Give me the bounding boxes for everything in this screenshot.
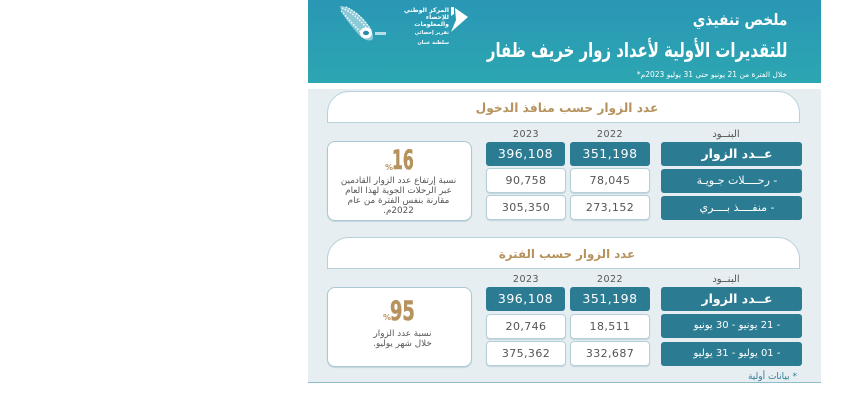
callout: 95 percent — [327, 287, 472, 367]
callout description: خلال شهر يوليو. — [373, 339, 432, 349]
row label: visitors: عــدد الزوار — [701, 291, 773, 306]
land 2023: 305,350 — [502, 201, 550, 214]
July 2023 — [486, 341, 566, 366]
July 2022 — [570, 341, 650, 366]
logo: sub text: تقرير إحصائي — [415, 30, 449, 36]
percent sign: % — [383, 313, 391, 322]
land 2023 — [486, 195, 566, 220]
heading: executive summary: ملخص تنفيذي — [692, 11, 787, 29]
year label 2023: 2023 — [513, 274, 539, 285]
row label: visitors — [661, 287, 802, 311]
callout description — [373, 329, 432, 349]
row label: land — [661, 196, 802, 220]
June 2023 — [486, 314, 566, 339]
footnote: * بيانات أولية — [748, 372, 797, 382]
row label: visitors — [661, 142, 802, 166]
percent value: 16 — [392, 145, 414, 176]
column label: items: البنــود — [712, 274, 740, 285]
year label 2022: 2022 — [597, 274, 623, 285]
2022 total — [570, 142, 650, 166]
row label: air — [661, 169, 802, 193]
June 2022 — [570, 314, 650, 339]
2022 total — [570, 287, 650, 311]
logo: national centre text: للإحصاء — [426, 14, 449, 21]
callout description: مقارنة بنفس الفترة من عام — [348, 196, 449, 206]
2023 total — [486, 287, 565, 311]
percent value: 95 — [390, 296, 415, 327]
content background — [308, 89, 821, 383]
logo: sub text — [414, 30, 449, 46]
July 2022: 332,687 — [586, 347, 634, 360]
land 2022 — [570, 195, 650, 220]
callout: 16 percent — [327, 141, 472, 221]
percent sign: % — [385, 163, 393, 172]
icon: comet emblem — [340, 6, 386, 40]
row label: June — [661, 314, 802, 338]
row label: land: - منفــــذ بــــري — [699, 201, 775, 214]
June 2023: 20,746 — [506, 320, 546, 333]
row label: July: - 01 يوليو - 31 يوليو — [694, 348, 780, 359]
row label: June: - 21 يونيو - 30 يونيو — [694, 320, 780, 331]
panel title: by period — [327, 237, 800, 269]
panel title: by entry ports — [327, 91, 800, 123]
air 2023 — [486, 168, 566, 193]
air 2023: 90,758 — [506, 174, 546, 187]
land 2022: 273,152 — [586, 201, 634, 214]
panel title: by entry ports: عدد الزوار حسب منافذ الدخول — [476, 101, 658, 115]
callout description — [341, 176, 456, 216]
heading: main title: للتقديرات الأولية لأعداد زوار خريف ظفار — [486, 38, 787, 62]
2023 total: 396,108 — [498, 146, 553, 161]
2023 total — [486, 142, 565, 166]
July 2023: 375,362 — [502, 347, 550, 360]
icon: centre logo mark — [451, 7, 468, 32]
row label: July — [661, 342, 802, 366]
year label 2022: 2022 — [597, 129, 623, 140]
air 2022: 78,045 — [590, 174, 630, 187]
June 2022: 18,511 — [590, 320, 630, 333]
panel title: by period: عدد الزوار حسب الفترة — [499, 247, 635, 261]
2023 total: 396,108 — [498, 291, 553, 306]
year label 2023: 2023 — [513, 129, 539, 140]
callout description: نسبة إرتفاع عدد الزوار القادمين — [341, 176, 456, 186]
logo: national centre text: المركز الوطني — [404, 7, 449, 14]
callout description: نسبة عدد الزوار — [374, 329, 431, 339]
banner — [308, 0, 821, 83]
logo: national centre text — [404, 7, 449, 28]
row label: air: - رحــــلات جـويـة — [697, 174, 777, 187]
logo: sub text: سلطنة عمان — [417, 40, 449, 46]
air 2022 — [570, 168, 650, 193]
callout description: عبر الرحلات الجوية لهذا العام — [345, 186, 452, 196]
2022 total: 351,198 — [582, 291, 638, 306]
logo: national centre text: والمعلومات — [414, 21, 449, 28]
callout description: 2022م. — [383, 206, 414, 216]
2022 total: 351,198 — [582, 146, 638, 161]
row label: visitors: عــدد الزوار — [701, 146, 773, 161]
column label: items: البنــود — [712, 129, 740, 140]
subtitle: period: خلال الفترة من 21 يونيو حتى 31 يوليو 2023م* — [637, 70, 787, 79]
